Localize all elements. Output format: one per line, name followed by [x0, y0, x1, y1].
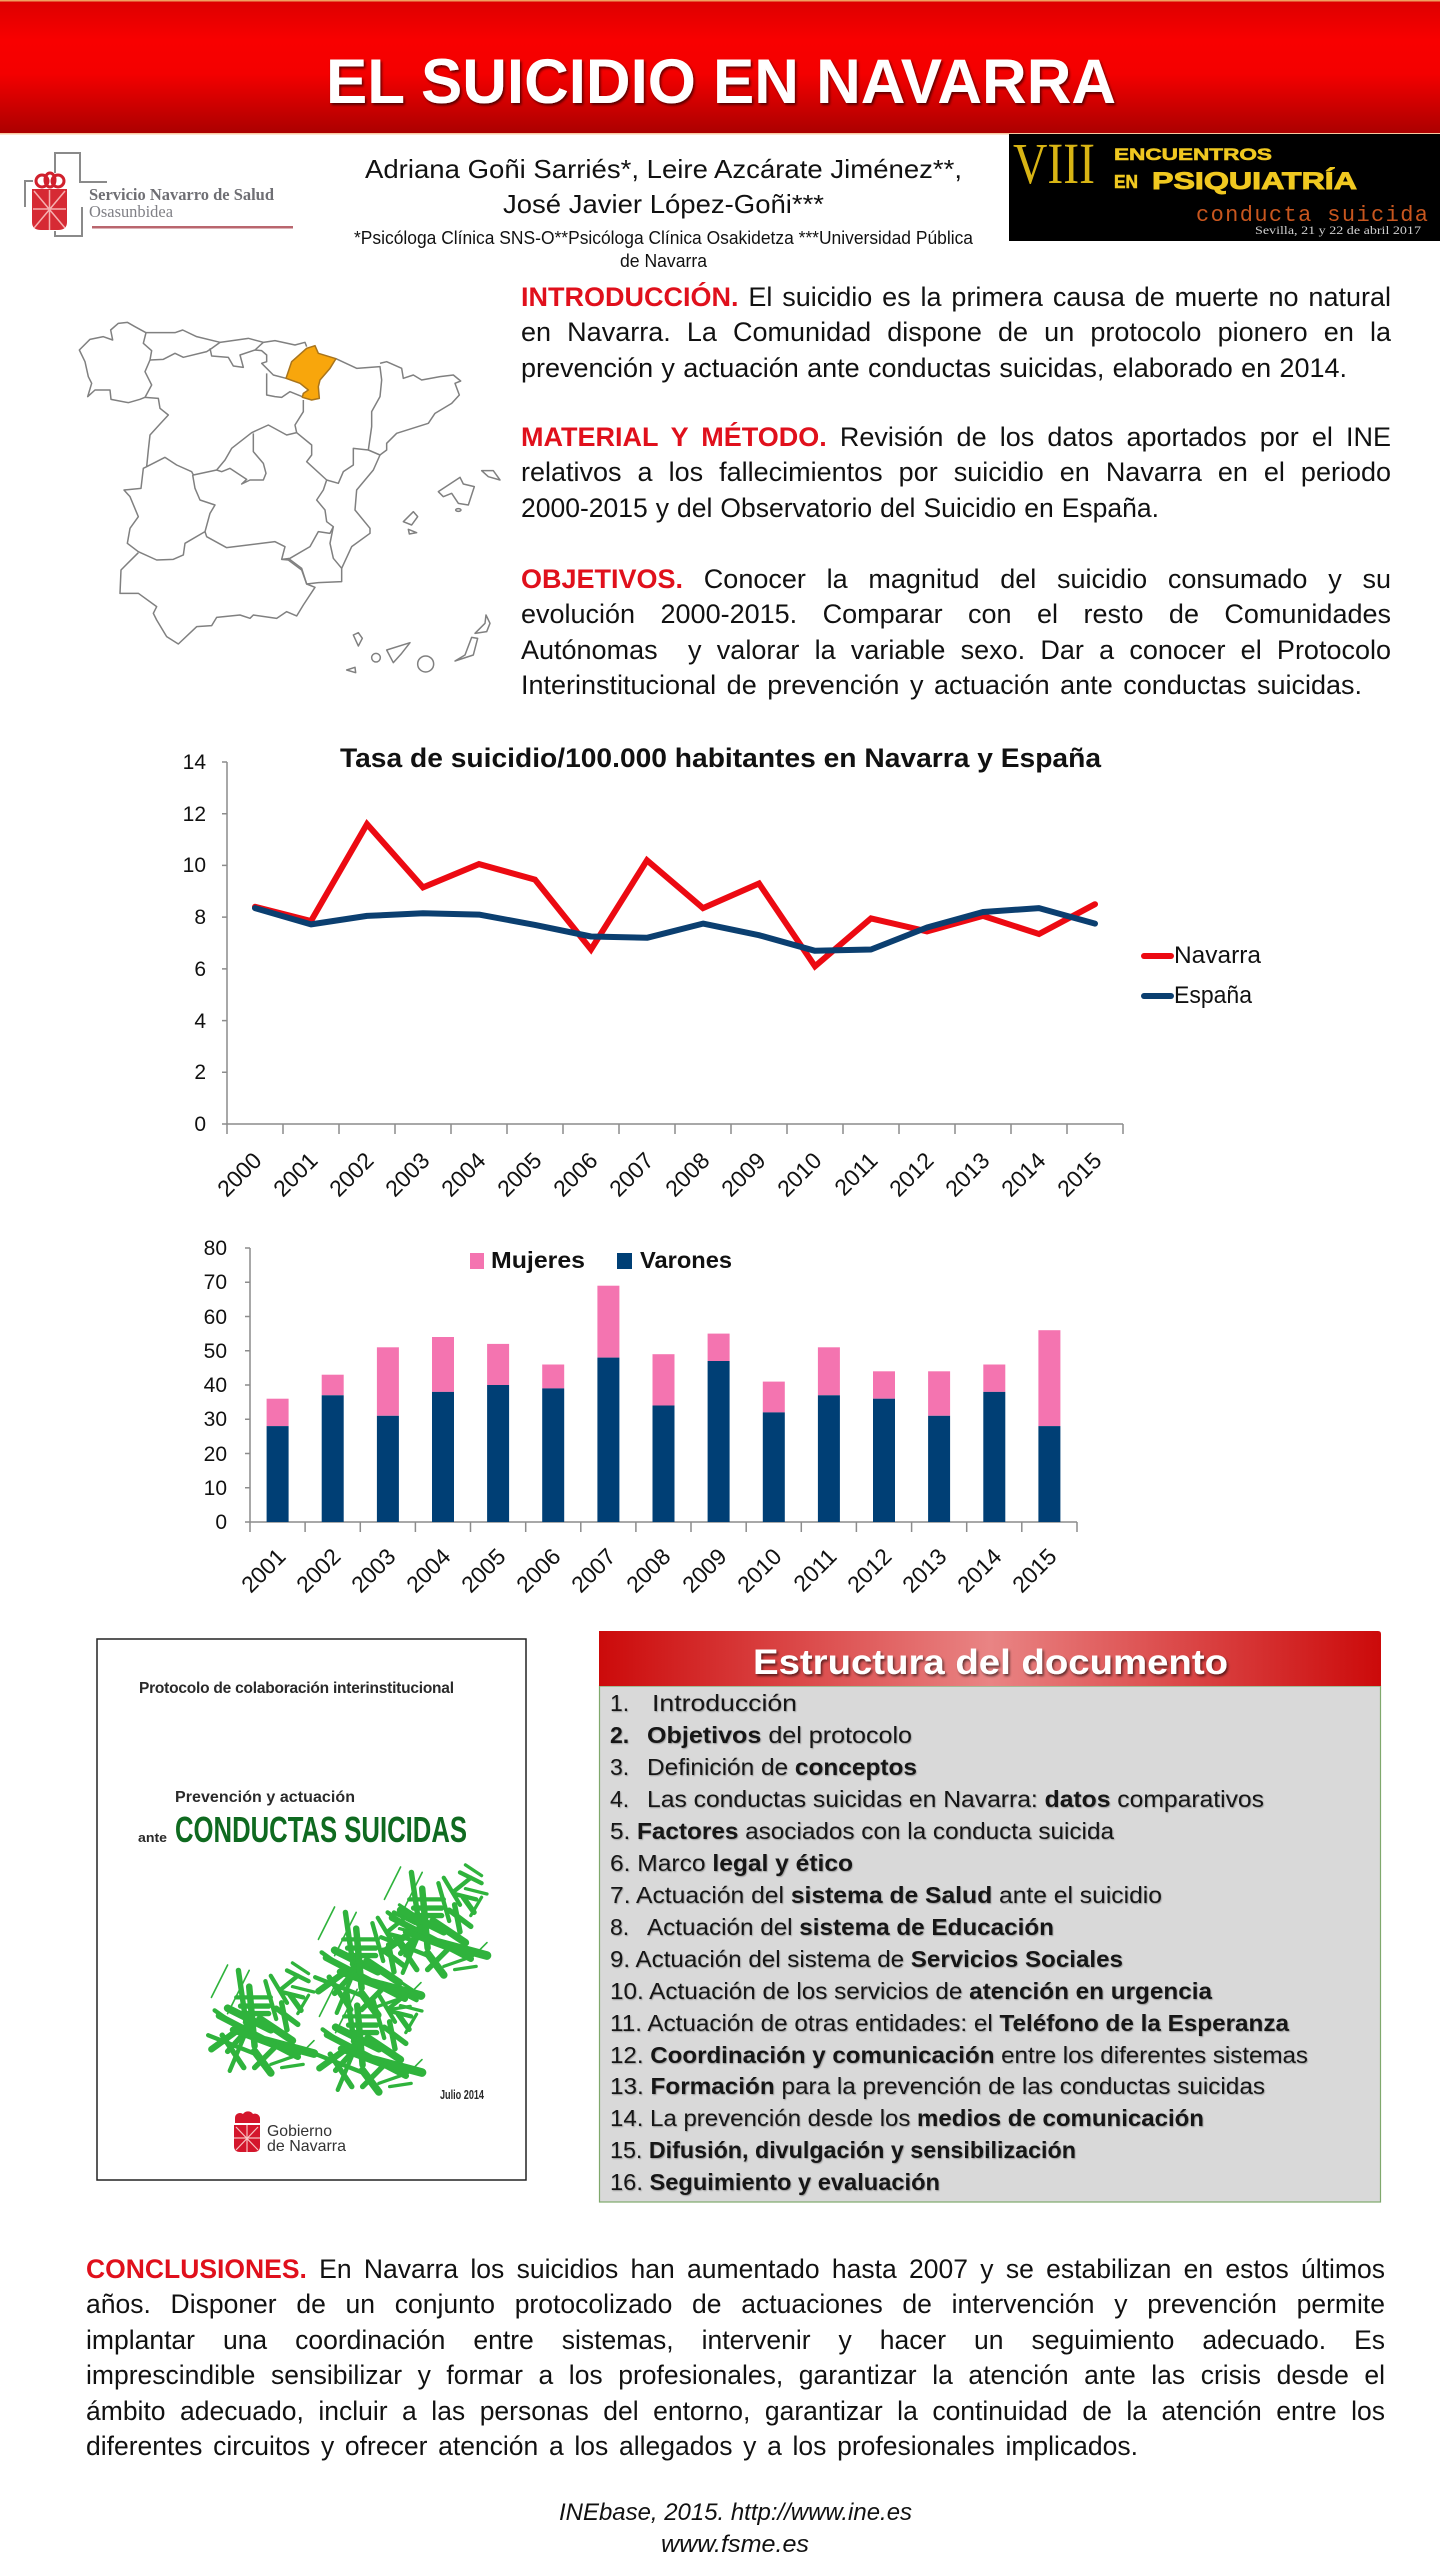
stacked bar chart: Mujeres and Varones: 10: [204, 1477, 227, 1500]
logo: VIII Encuentros en Psiquiatría: VIII: [1013, 131, 1095, 196]
document contents list: 4.: [610, 1786, 629, 1812]
line chart: suicide rate Navarra vs España: 2: [194, 1061, 206, 1084]
line chart: suicide rate Navarra vs España: 2003: [380, 1147, 435, 1202]
logo: VIII Encuentros en Psiquiatría: Sevilla, 21 y 22 de abril 2017: [1255, 223, 1421, 237]
document contents list: 9. Actuación del sistema de Servicios Sociales: [610, 1946, 1123, 1972]
document contents list: 1.: [610, 1690, 629, 1716]
document contents list: 11. Actuación de otras entidades: el Teléfono de la Esperanza: [610, 2010, 1289, 2036]
logo: Servicio Navarro de Salud: [25, 153, 293, 236]
references: www.fsme.es: [661, 2531, 809, 2558]
logo: VIII Encuentros en Psiquiatría: PSIQUIATRÍA: [1152, 167, 1357, 195]
document contents list: 5. Factores asociados con la conducta suicida: [610, 1818, 1114, 1844]
legend: Mujeres: [491, 1247, 585, 1273]
stacked bar chart: Mujeres and Varones: 2001: [236, 1543, 291, 1598]
text block: Introducción: prevención y actuación ante conductas suicidas, elaborado en 2014.: [521, 353, 1347, 383]
document contents list: Objetivos del protocolo: [647, 1722, 912, 1748]
text block: Introducción: en Navarra. La Comunidad dispone de un protocolo pionero en la: [521, 317, 1391, 347]
region: Navarra: [286, 346, 336, 400]
document contents list: Las conductas suicidas en Navarra: datos comparativos: [647, 1786, 1264, 1812]
document contents list: 12. Coordinación y comunicación entre los diferentes sistemas: [610, 2042, 1308, 2068]
text block: Objetivos: evolución 2000-2015. Comparar con el resto de Comunidades: [521, 599, 1391, 629]
protocol document cover: CONDUCTAS SUICIDAS: [175, 1809, 467, 1850]
logo: VIII Encuentros en Psiquiatría: ENCUENTROS: [1114, 145, 1272, 164]
stacked bar chart: Mujeres and Varones: 2015: [1007, 1543, 1062, 1598]
stacked bar chart: Mujeres and Varones: 60: [204, 1306, 227, 1329]
text block: Objetivos: Autónomas y valorar la variable sexo. Dar a conocer el Protocolo: [521, 635, 1391, 665]
stacked bar chart: Mujeres and Varones: 30: [204, 1408, 227, 1431]
text block: Conclusiones: imprescindible sensibilizar y formar a los profesionales, garantizar la atención ante las crisis desde el: [86, 2360, 1385, 2390]
line chart: suicide rate Navarra vs España: [183, 743, 1262, 1202]
line chart: suicide rate Navarra vs España: 6: [194, 958, 206, 981]
authors: [354, 154, 974, 271]
logo: Servicio Navarro de Salud: Servicio Navarro de Salud: [89, 185, 275, 204]
stacked bar chart: Mujeres and Varones: 2011: [788, 1543, 842, 1597]
legend: Varones: [640, 1247, 732, 1273]
text block: Introducción: INTRODUCCIÓN. El suicidio es la primera causa de muerte no natural: [521, 282, 1391, 312]
stacked bar chart: Mujeres and Varones: 0: [215, 1511, 227, 1534]
document contents list: Definición de conceptos: [647, 1754, 917, 1780]
legend: España: [1174, 982, 1253, 1009]
line chart: suicide rate Navarra vs España: 12: [183, 803, 206, 826]
text block: Conclusiones: implantar una coordinación entre sistemas, intervenir y hacer un seguimiento adecuado. Es: [86, 2325, 1385, 2355]
protocol document cover: Julio 2014: [440, 2088, 484, 2102]
line chart: suicide rate Navarra vs España: 2008: [660, 1147, 715, 1202]
text block: Material y método: MATERIAL Y MÉTODO. Revisión de los datos aportados por el INE: [521, 422, 1391, 452]
text block: Material y método: [521, 422, 1391, 523]
icon: green brushstroke pattern: [208, 1865, 487, 2092]
references: [559, 2499, 912, 2558]
line chart: suicide rate Navarra vs España: 0: [194, 1113, 206, 1136]
stacked bar chart: Mujeres and Varones: 70: [204, 1271, 227, 1294]
text block: Objetivos: Interinstitucional de prevención y actuación ante conductas suicidas.: [521, 670, 1362, 700]
stacked bar chart: Mujeres and Varones: 80: [204, 1237, 227, 1260]
document contents list: 15. Difusión, divulgación y sensibilización: [610, 2137, 1076, 2163]
stacked bar chart: Mujeres and Varones: 2014: [952, 1543, 1007, 1598]
document contents list: 3.: [610, 1754, 629, 1780]
logo: Servicio Navarro de Salud: Osasunbidea: [89, 202, 173, 221]
stacked bar chart: Mujeres and Varones: 2013: [897, 1543, 952, 1598]
text block: Conclusiones: [86, 2254, 1385, 2461]
line chart: suicide rate Navarra vs España: 2002: [324, 1147, 379, 1202]
text block: Objetivos: [521, 564, 1391, 700]
authors: Adriana Goñi Sarriés*, Leire Azcárate Jiménez**,: [365, 154, 962, 184]
protocol document cover: Protocolo de colaboración interinstitucional: [139, 1680, 454, 1697]
document contents list: 13. Formación para la prevención de las conductas suicidas: [610, 2073, 1265, 2099]
line chart: suicide rate Navarra vs España: 2015: [1052, 1147, 1107, 1202]
line chart: suicide rate Navarra vs España: 2010: [772, 1147, 827, 1202]
line chart: suicide rate Navarra vs España: 2014: [996, 1147, 1051, 1202]
document contents list: Introducción: [652, 1690, 797, 1716]
bars: Varones: [267, 1358, 1060, 1522]
text block: Introducción: [521, 282, 1391, 383]
authors: de Navarra: [620, 251, 708, 271]
chart title: Tasa de suicidio/100.000 habitantes en Navarra y España: [340, 743, 1102, 773]
line chart: suicide rate Navarra vs España: 2009: [716, 1147, 771, 1202]
line chart: suicide rate Navarra vs España: 2000: [212, 1147, 267, 1202]
line chart: suicide rate Navarra vs España: 10: [183, 854, 206, 877]
line chart: suicide rate Navarra vs España: 2013: [940, 1147, 995, 1202]
document contents list: [610, 1690, 1308, 2195]
stacked bar chart: Mujeres and Varones: 2005: [456, 1543, 511, 1598]
stacked bar chart: Mujeres and Varones: 20: [204, 1443, 227, 1466]
line chart: suicide rate Navarra vs España: 2012: [884, 1147, 939, 1202]
line chart: suicide rate Navarra vs España: 8: [194, 906, 206, 929]
line chart: suicide rate Navarra vs España: 2011: [829, 1147, 883, 1201]
panel header: Estructura del documento: [753, 1643, 1228, 1682]
text block: Conclusiones: CONCLUSIONES. En Navarra los suicidios han aumentado hasta 2007 y se estabilizan en estos últimos: [86, 2254, 1385, 2284]
stacked bar chart: Mujeres and Varones: 2008: [621, 1543, 676, 1598]
line chart: suicide rate Navarra vs España: 14: [183, 751, 206, 774]
legend: [470, 1247, 732, 1273]
document contents list: 7. Actuación del sistema de Salud ante el suicidio: [610, 1882, 1162, 1908]
series: España: [255, 908, 1095, 951]
bars: Mujeres: [267, 1286, 1060, 1426]
authors: *Psicóloga Clínica SNS-O**Psicóloga Clínica Osakidetza ***Universidad Pública: [354, 228, 974, 248]
line chart: suicide rate Navarra vs España: 2004: [436, 1147, 491, 1202]
panel header: [599, 1631, 1381, 1686]
legend: [1144, 942, 1262, 1009]
panel: Estructura del documento: [599, 1631, 1381, 2202]
stacked bar chart: Mujeres and Varones: 2010: [732, 1543, 787, 1598]
logo: VIII Encuentros en Psiquiatría: conducta suicida: [1196, 203, 1428, 228]
title banner: [0, 0, 1440, 134]
logo: VIII Encuentros en Psiquiatría: [1009, 131, 1440, 241]
stacked bar chart: Mujeres and Varones: 50: [204, 1340, 227, 1363]
document contents list: 8.: [610, 1914, 629, 1940]
authors: José Javier López-Goñi***: [503, 189, 824, 219]
line chart: suicide rate Navarra vs España: 2007: [604, 1147, 659, 1202]
stacked bar chart: Mujeres and Varones: 2009: [677, 1543, 732, 1598]
document contents list: Actuación del sistema de Educación: [647, 1914, 1054, 1940]
logo: Gobierno de Navarra: [234, 2111, 346, 2155]
stacked bar chart: Mujeres and Varones: 2002: [291, 1543, 346, 1598]
logo: Gobierno de Navarra: Gobierno: [267, 2123, 332, 2140]
text block: Material y método: relativos a los fallecimientos por suicidio en Navarra en el periodo: [521, 457, 1391, 487]
stacked bar chart: Mujeres and Varones: 2003: [346, 1543, 401, 1598]
stacked bar chart: Mujeres and Varones: 2012: [842, 1543, 897, 1598]
stacked bar chart: Mujeres and Varones: 40: [204, 1374, 227, 1397]
protocol document cover: ante: [138, 1830, 167, 1845]
line chart: suicide rate Navarra vs España: 2006: [548, 1147, 603, 1202]
stacked bar chart: Mujeres and Varones: [204, 1237, 1077, 1598]
line chart: suicide rate Navarra vs España: 2005: [492, 1147, 547, 1202]
legend: Navarra: [1174, 942, 1262, 969]
protocol document cover: Prevención y actuación: [175, 1789, 355, 1806]
document contents list: 16. Seguimiento y evaluación: [610, 2169, 940, 2195]
protocol document cover: [97, 1639, 526, 2180]
text block: Conclusiones: diferentes circuitos y ofrecer atención a los allegados y a los profesionales implicados.: [86, 2431, 1138, 2461]
references: INEbase, 2015. http://www.ine.es: [559, 2499, 912, 2526]
logo: Gobierno de Navarra: de Navarra: [267, 2138, 346, 2155]
line chart: suicide rate Navarra vs España: 2001: [268, 1147, 323, 1202]
line chart: suicide rate Navarra vs España: 4: [194, 1010, 206, 1033]
document contents list: 6. Marco legal y ético: [610, 1850, 853, 1876]
text block: Objetivos: OBJETIVOS. Conocer la magnitud del suicidio consumado y su: [521, 564, 1391, 594]
text block: Conclusiones: años. Disponer de un conjunto protocolizado de actuaciones de intervención y prevención permite: [86, 2289, 1385, 2319]
series: Navarra: [255, 824, 1095, 966]
text block: Material y método: 2000-2015 y del Observatorio del Suicidio en España.: [521, 493, 1159, 523]
stacked bar chart: Mujeres and Varones: 2007: [566, 1543, 621, 1598]
document contents list: 14. La prevención desde los medios de comunicación: [610, 2105, 1204, 2131]
document contents list: 10. Actuación de los servicios de atención en urgencia: [610, 1978, 1212, 2004]
title: EL SUICIDIO EN NAVARRA: [326, 47, 1116, 117]
stacked bar chart: Mujeres and Varones: 2004: [401, 1543, 456, 1598]
map of Spain with Navarra highlighted: [79, 322, 500, 673]
text block: Conclusiones: ámbito adecuado, incluir a las personas del entorno, garantizar la continuidad de la atención entre los: [86, 2396, 1385, 2426]
logo: VIII Encuentros en Psiquiatría: EN: [1114, 172, 1138, 192]
document contents list: 2.: [610, 1722, 629, 1748]
stacked bar chart: Mujeres and Varones: 2006: [511, 1543, 566, 1598]
